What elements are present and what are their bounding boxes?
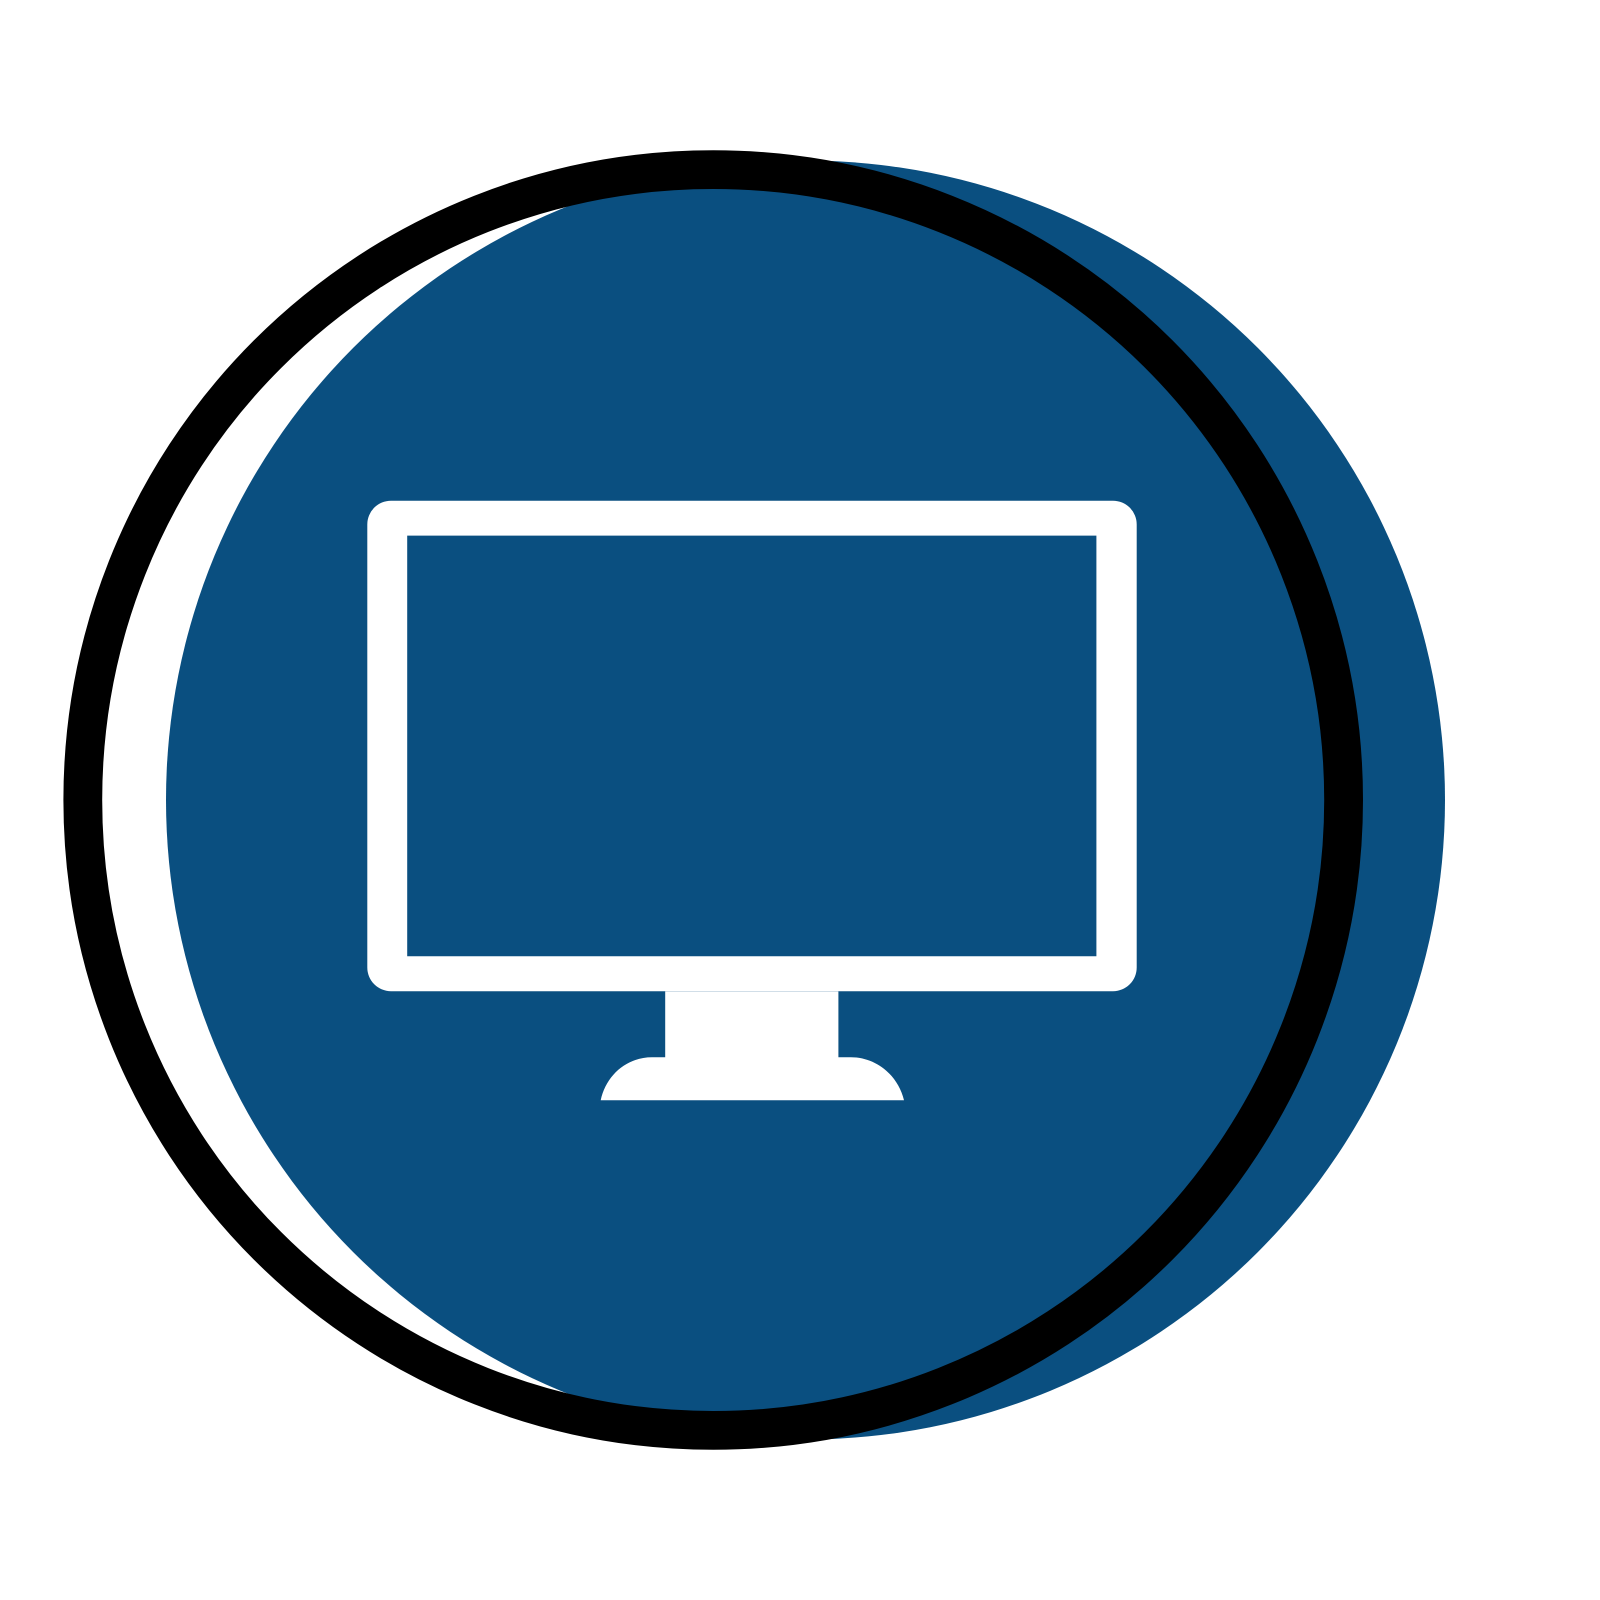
monitor stand and base xyxy=(601,991,904,1100)
icon: monitor xyxy=(367,501,1137,1100)
blue disc background xyxy=(166,160,1445,1440)
monitor screen frame xyxy=(367,501,1137,991)
black ring outline xyxy=(83,170,1344,1430)
